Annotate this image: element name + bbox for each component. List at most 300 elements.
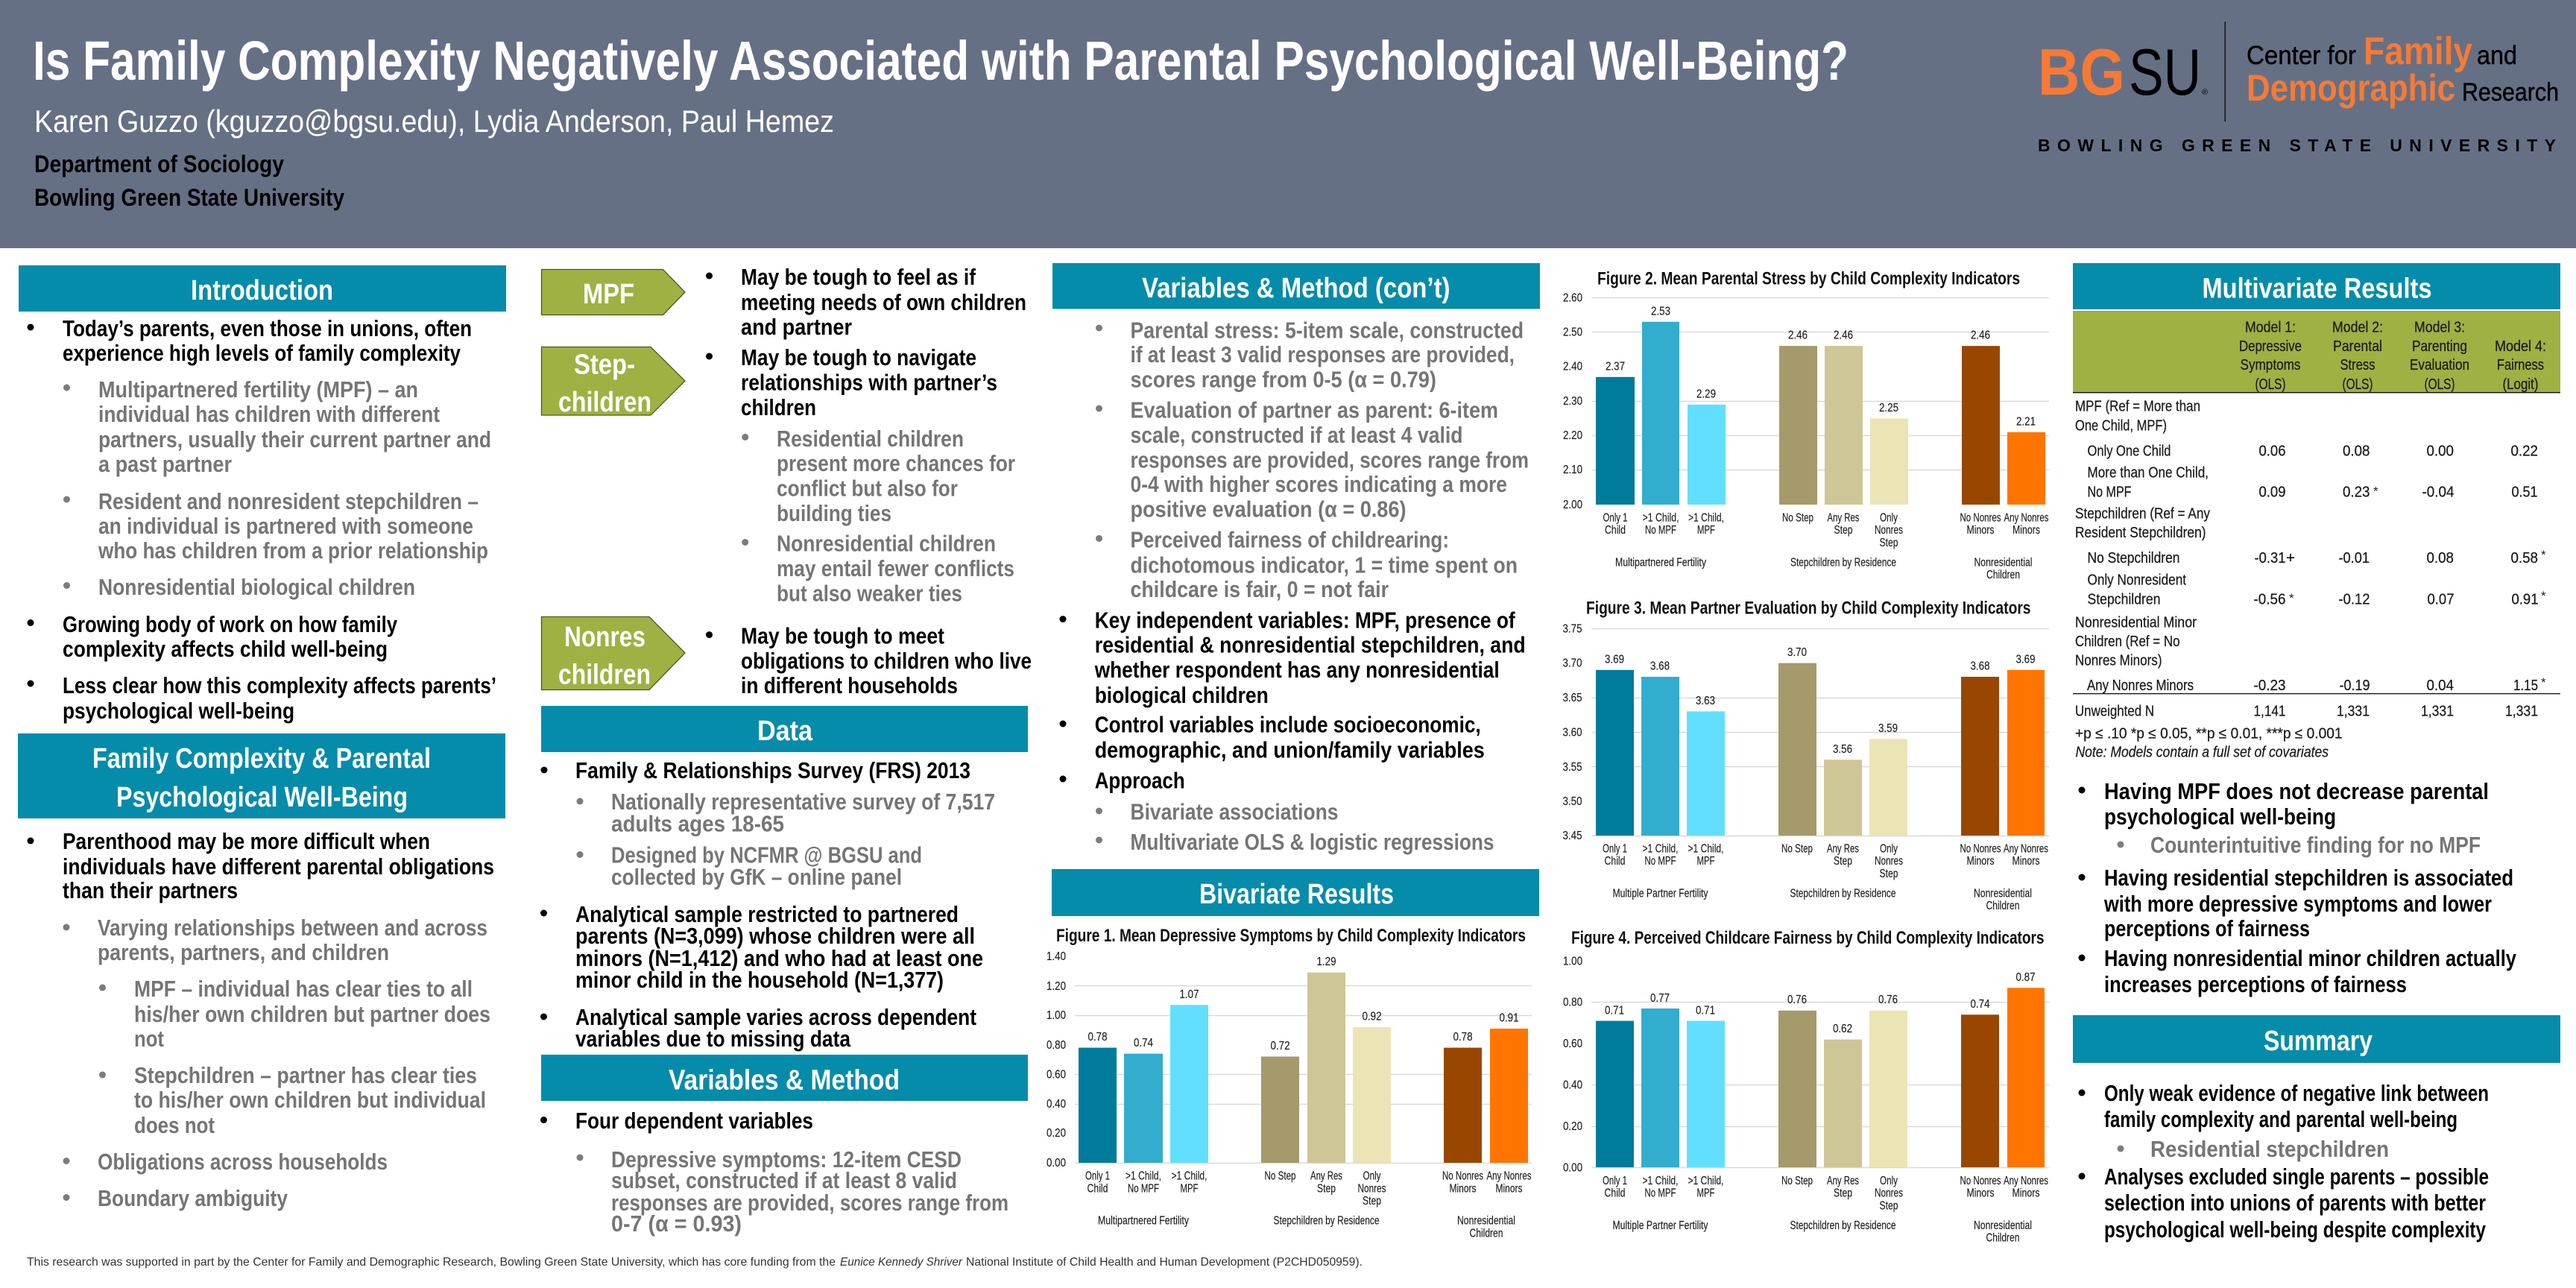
text block: multivariate findings: with more depressive symptoms and lower (2103, 891, 2492, 917)
text block: stepchildren: children (741, 394, 816, 420)
table values: -0.12 (2339, 592, 2370, 608)
category labels: figure 1: Any Nonres (1486, 1170, 1531, 1182)
text block: multivariate findings: increases perceptions of fairness (2104, 971, 2407, 997)
value labels: figure 2: 2.29 (1696, 388, 1716, 401)
heading: multivariate results: Multivariate Results (2202, 273, 2431, 304)
text block: method bullets: residential & nonresidential stepchildren, and (1095, 632, 1526, 657)
category labels: figure 1: >1 Child, (1126, 1170, 1161, 1182)
text block: dependent variables (540, 1108, 1008, 1237)
text block: family complexity bullets: to his/her own children but individual (134, 1087, 486, 1113)
table values: 0.07 (2427, 592, 2454, 608)
table header: Depressive (2239, 338, 2302, 355)
arrow: stepchildren (541, 347, 685, 418)
table header: (OLS) (2424, 376, 2455, 393)
bars: figure 1 (1079, 973, 1528, 1163)
affiliation: Bowling Green State University (34, 184, 344, 211)
table values: 0.09 (2258, 484, 2285, 501)
text block: family complexity bullets: not (134, 1026, 164, 1052)
y axis: figure 2: 2.10 (1563, 464, 1582, 476)
category labels: figure 3: Only 1 (1603, 842, 1627, 856)
y axis: figure 3: 3.55 (1562, 761, 1582, 774)
value labels: figure 1: 0.74 (1134, 1037, 1153, 1049)
y axis: figure 3: 3.50 (1562, 795, 1582, 808)
category labels: figure 2: Step (1880, 537, 1898, 549)
y axis: figure 1: 0.40 (1046, 1098, 1066, 1111)
category labels: figure 4: Step (1880, 1200, 1898, 1212)
arrow: nonresident children: Nonres (564, 622, 645, 653)
category labels: figure 3: Only (1880, 842, 1898, 856)
text block: data bullets (540, 757, 995, 1052)
table header: Model 1: (2245, 319, 2296, 335)
text block: nonresident children (706, 623, 1032, 698)
y axis: figure 4: 0.60 (1563, 1038, 1582, 1050)
value labels: figure 3: 3.56 (1833, 743, 1852, 756)
table row labels: Only Nonresident (2087, 572, 2186, 589)
table values: -0.56 (2254, 592, 2285, 608)
text block: introduction bullets: who has children from a prior relationship (98, 537, 488, 564)
text block: family complexity bullets: than their partners (63, 877, 238, 903)
category labels: figure 1: No Step (1264, 1170, 1296, 1182)
text block: introduction bullets: Resident and nonresident stepchildren – (98, 488, 479, 514)
text block: MPF: May be tough to feel as if (741, 264, 976, 290)
text block: stepchildren: but also weaker ties (777, 580, 962, 607)
affiliation (34, 151, 344, 211)
panel: family complexity and parental psychological well-being (18, 733, 505, 1211)
text block: family complexity bullets: does not (134, 1112, 215, 1138)
category labels: figure 4: Only 1 (1603, 1175, 1627, 1187)
category labels: figure 3: >1 Child, (1688, 842, 1723, 856)
text block: introduction bullets: experience high levels of family complexity (63, 340, 461, 366)
table row labels: Stepchildren (Ref = Any (2075, 505, 2210, 522)
y axis: figure 1: 0.60 (1046, 1069, 1066, 1081)
table values: 0.58 (2510, 550, 2538, 566)
chart: figure 2 parental stress (1563, 268, 2049, 581)
table row labels: Resident Stepchildren) (2075, 525, 2206, 541)
text block: nonresident children: in different households (741, 672, 958, 698)
text block: method bullets: Control variables include socioeconomic, (1095, 711, 1481, 738)
category labels: figure 2: Child (1605, 524, 1626, 537)
table header: (Logit) (2503, 376, 2539, 393)
text block: family complexity bullets: MPF – individual has clear ties to all (134, 976, 473, 1002)
heading: introduction: Introduction (191, 275, 333, 306)
category labels: figure 2: No Step (1782, 511, 1813, 525)
text block: dependent variables: subset, constructed if at least 8 valid (611, 1167, 957, 1193)
value labels: figure 1: 0.78 (1088, 1031, 1108, 1044)
category labels: figure 4: Nonres (1875, 1187, 1903, 1200)
header banner (0, 0, 2576, 248)
table values: 1,331 (2421, 704, 2454, 720)
y axis: figure 4: 0.20 (1563, 1120, 1582, 1133)
table row labels: Only One Child (2087, 443, 2171, 459)
y axis: figure 4: 0.00 (1563, 1161, 1582, 1175)
table row labels: No MPF (2087, 484, 2132, 501)
text block: family complexity bullets: individuals have different parental obligations (63, 853, 494, 880)
footnote: funding acknowledgement (27, 1256, 1363, 1269)
heading: summary (2073, 1015, 2560, 1063)
panel: complexity types with arrows (541, 264, 1032, 698)
y axis: figure 1: 0.80 (1046, 1039, 1066, 1052)
category labels: figure 1: Minors (1449, 1182, 1476, 1196)
value labels: figure 1: 0.72 (1270, 1040, 1290, 1052)
category labels: figure 2: Stepchildren by Residence (1790, 556, 1896, 569)
heading: variables and method continued (1052, 263, 1540, 309)
text block: stepchildren: conflict but also for (777, 476, 958, 501)
text block: multivariate findings: Having MPF does not decrease parental (2104, 778, 2489, 804)
table header: Parenting (2412, 338, 2467, 355)
text block: nonresident children: obligations to children who live (741, 648, 1032, 674)
table row labels: Nonres Minors) (2075, 653, 2162, 669)
chart title: figure 3: Figure 3. Mean Partner Evaluation by Child Complexity Indicators (1586, 598, 2030, 619)
y axis: figure 4 (1563, 956, 2049, 1175)
table row labels: Unweighted N (2075, 704, 2154, 720)
logo: BGSU and Center for Family and Demographic Research: Demographic (2247, 67, 2455, 109)
y axis: figure 3: 3.60 (1562, 726, 1582, 739)
text block: stepchildren: Nonresidential children (777, 531, 996, 556)
text block: stepchildren: building ties (777, 500, 891, 526)
text block: introduction bullets: Today’s parents, even those in unions, often (63, 315, 472, 341)
text block: introduction bullets: an individual is partnered with someone (98, 513, 473, 539)
category labels: figure 4: >1 Child, (1688, 1175, 1723, 1187)
category labels: figure 1: Stepchildren by Residence (1273, 1215, 1380, 1227)
table values: 0.23 (2343, 484, 2370, 501)
category labels: figure 3: No Step (1781, 842, 1813, 856)
authors: Karen Guzzo (kguzzo@bgsu.edu), Lydia Anderson, Paul Hemez (34, 104, 834, 139)
table header: Fairness (2497, 357, 2544, 373)
text block: family complexity bullets: Boundary ambiguity (98, 1185, 288, 1211)
category labels: figure 2: Any Nonres (2004, 511, 2048, 525)
table values: -0.01 (2339, 550, 2370, 566)
category labels: figure 4: Minors (1966, 1187, 1995, 1200)
panel: multivariate results (2073, 263, 2560, 997)
text block: method bullets: 0-4 with higher scores indicating a more (1130, 471, 1507, 497)
text block: introduction bullets: a past partner (98, 451, 232, 477)
logo: BGSU and Center for Family and Demographic Research: ® (2202, 88, 2208, 97)
category labels: figure 3: Child (1604, 855, 1625, 868)
category labels: figure 2: Any Res (1828, 511, 1859, 525)
value labels: figure 3: 3.68 (1971, 660, 1990, 672)
chart title: figure 2: Figure 2. Mean Parental Stress by Child Complexity Indicators (1597, 268, 2020, 289)
y axis: figure 4: 0.80 (1563, 996, 1582, 1009)
table values: -0.04 (2422, 484, 2454, 501)
table row labels: One Child, MPF) (2075, 417, 2167, 434)
category labels: figure 2: >1 Child, (1688, 511, 1724, 525)
bars: figure 3 (1596, 663, 2045, 836)
category labels: figure 2: Only (1880, 511, 1898, 525)
table header: Model 3: (2414, 319, 2465, 335)
footnote: funding acknowledgement: Eunice Kennedy Shriver (840, 1256, 963, 1269)
text block: family complexity bullets (27, 828, 494, 1211)
category labels: figure 3: Any Res (1827, 842, 1859, 856)
value labels: figure 3: 3.68 (1650, 660, 1670, 672)
footnote: funding acknowledgement: This research was supported in part by the Center for Family and Demographic Research, Bowling Green State University, which has core funding from the (27, 1256, 836, 1269)
text block: method bullets: responses are provided, scores range from (1130, 447, 1529, 473)
text block: data bullets: parents (N=3,099) whose children were all (575, 923, 975, 949)
category labels: figure 4: Stepchildren by Residence (1790, 1219, 1896, 1232)
value labels: figure 1: 1.07 (1179, 988, 1199, 1001)
arrow: nonresident children: children (558, 659, 651, 690)
logo: BGSU and Center for Family and Demographic Research: BOWLING GREEN STATE UNIVERSITY (2038, 136, 2556, 155)
text block: MPF (706, 264, 1026, 340)
category labels: figure 1: >1 Child, (1172, 1170, 1208, 1182)
text block: data bullets: collected by GfK – online panel (611, 864, 902, 890)
logo: BGSU and Center for Family and Demographic Research: SU (2129, 35, 2201, 109)
y axis: figure 2: 2.20 (1563, 429, 1582, 442)
text block: summary bullets: selection into unions of parents with better (2104, 1190, 2486, 1216)
category labels: figure 1: Step (1363, 1195, 1381, 1208)
arrow: stepchildren: children (558, 387, 651, 418)
text block: family complexity bullets: Stepchildren – partner has clear ties (134, 1062, 477, 1088)
category labels: figure 3: Minors (2012, 855, 2039, 868)
table notes: Note: Models contain a full set of covariates (2075, 744, 2329, 760)
text block: method bullets: Multivariate OLS & logistic regressions (1130, 829, 1494, 855)
text block: stepchildren: present more chances for (777, 450, 1015, 476)
y axis: figure 1: 1.40 (1046, 950, 1066, 963)
text block: data bullets: minors (N=1,412) and who had at least one (575, 945, 983, 971)
text block: introduction bullets: complexity affects child well-being (63, 636, 388, 662)
heading: summary: Summary (2264, 1026, 2373, 1057)
table header: Stress (2340, 357, 2375, 373)
category labels: figure 1: Nonresidential (1457, 1215, 1515, 1227)
y axis: figure 4: 0.40 (1563, 1079, 1582, 1091)
table row labels: More than One Child, (2087, 465, 2209, 482)
arrow: MPF: MPF (583, 279, 634, 310)
value labels: figure 4 (1605, 971, 2036, 1035)
heading: data (541, 706, 1028, 752)
text block: stepchildren: may entail fewer conflicts (777, 555, 1014, 581)
text block: data bullets: Designed by NCFMR @ BGSU and (611, 842, 922, 868)
category labels: figure 4: No MPF (1644, 1187, 1676, 1200)
heading: family complexity: Psychological Well-Being (116, 782, 408, 813)
category labels: figure 3: Nonres (1875, 855, 1903, 868)
category labels: figure 4: Child (1604, 1187, 1625, 1200)
y axis: figure 4: 1.00 (1563, 956, 1582, 967)
table header: Symptoms (2241, 357, 2300, 373)
panel: summary (2073, 1015, 2560, 1243)
value labels: figure 3 (1605, 646, 2036, 756)
text block: method bullets: if at least 3 valid responses are provided, (1130, 341, 1515, 367)
category labels: figure 2: Nonresidential (1974, 556, 2032, 569)
category labels: figure 1: MPF (1181, 1182, 1199, 1196)
y axis: figure 2: 2.50 (1563, 326, 1582, 338)
panel: data (540, 706, 1028, 1052)
value labels: figure 3: 3.69 (2015, 653, 2036, 666)
category labels: figure 1: Child (1087, 1182, 1108, 1196)
table header (2073, 311, 2560, 393)
y axis: figure 2 (1563, 292, 2049, 511)
value labels: figure 1: 1.29 (1316, 956, 1336, 968)
text block: method bullets: Parental stress: 5-item scale, constructed (1130, 318, 1524, 343)
y axis: figure 2: 2.40 (1563, 361, 1582, 373)
table values: * (2541, 675, 2546, 689)
table values: * (2541, 589, 2546, 603)
table values (2073, 443, 2560, 720)
logo: BGSU and Center for Family and Demographic Research (2038, 22, 2559, 155)
y axis: figure 2: 2.00 (1563, 499, 1582, 511)
text block: family complexity bullets: Parenthood may be more difficult when (63, 828, 430, 854)
value labels: figure 4: 0.76 (1787, 994, 1807, 1006)
table header: (OLS) (2255, 376, 2285, 393)
text block: dependent variables: responses are provided, scores range from (611, 1190, 1008, 1216)
text block: method bullets: dichotomous indicator, 1 = time spent on (1130, 552, 1518, 578)
category labels: figure 3: Step (1880, 868, 1898, 880)
table values: * (2289, 591, 2294, 605)
category labels: figure 2: Step (1834, 524, 1853, 537)
category labels: figure 1: Children (1470, 1227, 1503, 1240)
text block: stepchildren: May be tough to navigate (741, 344, 976, 370)
category labels: figure 3: No Nonres (1960, 842, 2001, 856)
value labels: figure 4: 0.74 (1971, 998, 1990, 1011)
value labels: figure 2: 2.53 (1651, 306, 1670, 318)
table values: * (2541, 548, 2546, 562)
table values: -0.23 (2254, 678, 2285, 694)
category labels: figure 2: No MPF (1645, 524, 1676, 537)
value labels: figure 2: 2.46 (1971, 329, 1990, 341)
value labels: figure 3: 3.70 (1787, 646, 1807, 659)
y axis: figure 1 (1046, 950, 1532, 1169)
text block: method bullets (1060, 318, 1529, 855)
text block: method bullets: Key independent variables: MPF, presence of (1095, 607, 1515, 634)
y axis: figure 3: 3.65 (1562, 692, 1582, 704)
logo: BGSU and Center for Family and Demographic Research: BG (2038, 35, 2125, 109)
text block: dependent variables: Depressive symptoms: 12-item CESD (611, 1146, 962, 1172)
text block: method bullets: scale, constructed if at least 4 valid (1130, 422, 1462, 448)
arrow: nonresident children (541, 617, 685, 690)
heading: multivariate results (2073, 263, 2560, 309)
value labels: figure 4: 0.71 (1696, 1005, 1715, 1017)
text block: data bullets: minor child in the household (N=1,377) (575, 967, 944, 993)
category labels: figure 4: Any Res (1827, 1175, 1859, 1187)
category labels: figure 2 (1603, 511, 2048, 581)
text block: method bullets: demographic, and union/family variables (1095, 736, 1485, 763)
value labels: figure 3: 3.59 (1878, 722, 1898, 735)
category labels: figure 1: Any Res (1310, 1170, 1342, 1182)
panel: variables and method continued (1052, 263, 1540, 855)
table values: 1,141 (2254, 704, 2285, 720)
table values: 0.04 (2427, 678, 2454, 694)
category labels: figure 4: No Nonres (1960, 1175, 2001, 1187)
table header: Model 4: (2495, 338, 2546, 355)
text block: method bullets: whether respondent has any nonresidential (1094, 657, 1500, 683)
y axis: figure 1: 0.00 (1046, 1157, 1066, 1169)
text block: method bullets: childcare is fair, 0 = not fair (1130, 576, 1389, 602)
category labels: figure 3: Any Nonres (2004, 842, 2048, 856)
text block: multivariate findings (2078, 778, 2517, 997)
category labels: figure 3 (1603, 842, 2048, 912)
value labels: figure 4: 0.62 (1833, 1023, 1852, 1035)
text block: method bullets: Perceived fairness of childrearing: (1130, 526, 1449, 553)
y axis: figure 1: 1.00 (1046, 1009, 1066, 1022)
category labels: figure 2: MPF (1697, 524, 1715, 537)
value labels: figure 1: 0.78 (1453, 1031, 1473, 1044)
text block: dependent variables: Four dependent variables (575, 1108, 813, 1134)
y axis: figure 2: 2.30 (1563, 395, 1582, 408)
text block: multivariate findings: perceptions of fairness (2104, 915, 2310, 941)
chart: figure 3 partner evaluation (1562, 598, 2049, 912)
table values: 0.22 (2510, 443, 2538, 459)
value labels: figure 2: 2.46 (1788, 329, 1808, 341)
category labels: figure 4: Minors (2012, 1187, 2039, 1200)
table notes (2075, 726, 2342, 760)
text block: dependent variables: 0-7 (α = 0.93) (611, 1210, 742, 1237)
text block: summary bullets (2078, 1080, 2489, 1243)
category labels: figure 4: MPF (1696, 1187, 1715, 1200)
text block: MPF: and partner (741, 314, 852, 340)
value labels: figure 4: 0.71 (1605, 1005, 1624, 1017)
table header: Parental (2333, 338, 2382, 355)
table row labels: Nonresidential Minor (2075, 614, 2197, 631)
category labels: figure 2: Nonres (1875, 524, 1903, 537)
panel: bivariate results (1046, 869, 1539, 1240)
text block: method bullets: positive evaluation (α = 0.86) (1130, 496, 1406, 522)
category labels: figure 1 (1085, 1170, 1531, 1240)
category labels: figure 1: Minors (1495, 1182, 1522, 1196)
table row labels: Children (Ref = No (2075, 634, 2179, 650)
y axis: figure 1: 0.20 (1046, 1127, 1066, 1140)
category labels: figure 4: No Step (1781, 1175, 1813, 1187)
category labels: figure 4: Any Nonres (2004, 1175, 2048, 1187)
category labels: figure 3: >1 Child, (1643, 842, 1679, 856)
y axis: figure 3: 3.70 (1562, 657, 1582, 669)
text block: multivariate findings: Counterintuitive finding for no MPF (2150, 832, 2481, 858)
category labels: figure 1: Only (1363, 1170, 1380, 1182)
text block: data bullets: adults ages 18-65 (611, 811, 784, 836)
category labels: figure 3: Minors (1966, 855, 1995, 868)
category labels: figure 3: Step (1834, 855, 1852, 868)
table header: Evaluation (2410, 357, 2469, 373)
category labels: figure 3: Multiple Partner Fertility (1613, 887, 1708, 900)
table row labels: Stepchildren (2087, 592, 2160, 608)
value labels: figure 2: 2.37 (1606, 361, 1625, 373)
text block: family complexity bullets: his/her own children but partner does (134, 1001, 490, 1027)
heading: variables and method continued: Variables & Method (con’t) (1142, 273, 1450, 304)
table values: 0.08 (2343, 443, 2370, 459)
text block: introduction bullets: Growing body of work on how family (63, 611, 398, 637)
text block: data bullets: variables due to missing data (575, 1026, 851, 1052)
value labels: figure 2: 2.21 (2016, 416, 2036, 428)
logo: BGSU and Center for Family and Demographic Research: Research (2462, 78, 2559, 107)
table row labels: No Stepchildren (2087, 550, 2179, 566)
table header: (OLS) (2342, 376, 2373, 393)
category labels: figure 4: Multiple Partner Fertility (1613, 1219, 1708, 1232)
table values: 1.15 (2513, 678, 2538, 694)
text block: method bullets: scores range from 0-5 (α = 0.79) (1130, 367, 1436, 392)
y axis: figure 2: 2.60 (1563, 292, 1582, 304)
panel: variables and method (540, 1055, 1028, 1237)
category labels: figure 2: No Nonres (1960, 511, 2001, 525)
table values: 1,331 (2505, 704, 2538, 720)
category labels: figure 1: No Nonres (1442, 1170, 1483, 1182)
table row labels: Any Nonres Minors (2087, 678, 2194, 694)
table values: + (2286, 550, 2295, 566)
category labels: figure 1: Nonres (1358, 1182, 1386, 1196)
text block: data bullets: Analytical sample varies across dependent (575, 1004, 976, 1030)
category labels: figure 1: Step (1317, 1182, 1336, 1196)
chart: figure 4 childcare fairness (1563, 928, 2049, 1245)
value labels: figure 3: 3.63 (1696, 695, 1715, 707)
heading: bivariate results: Bivariate Results (1199, 879, 1394, 910)
category labels: figure 4: >1 Child, (1643, 1175, 1679, 1187)
category labels: figure 1: Multipartnered Fertility (1098, 1215, 1189, 1227)
category labels: figure 3: Nonresidential (1974, 887, 2032, 900)
table values: 0.00 (2427, 443, 2454, 459)
heading: variables and method (541, 1055, 1028, 1101)
text block: stepchildren (706, 344, 1015, 607)
text block: introduction bullets: individual has children with different (98, 401, 440, 427)
heading: bivariate results (1052, 869, 1539, 916)
text block: introduction bullets: partners, usually their current partner and (98, 426, 491, 452)
value labels: figure 4: 0.76 (1878, 994, 1898, 1006)
y axis: figure 3 (1562, 623, 2049, 842)
